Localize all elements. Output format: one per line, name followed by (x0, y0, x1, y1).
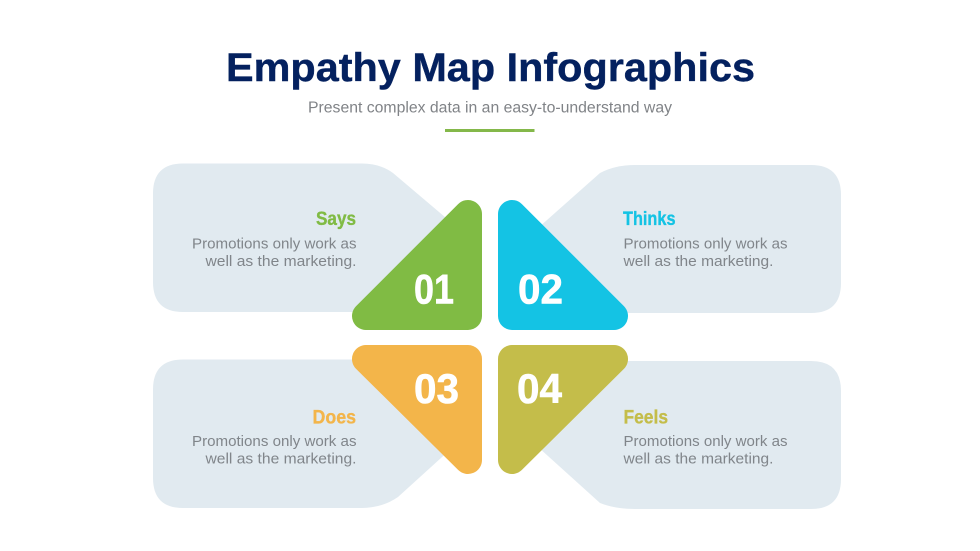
text block: does: well as the marketing. (204, 450, 356, 468)
triangle: 01 (352, 200, 482, 330)
heading: feels: Feels (624, 406, 668, 428)
title accent rule (445, 129, 534, 132)
text block: says: Promotions only work as (192, 236, 356, 252)
number 04: 04 (517, 365, 563, 412)
text block: does: Promotions only work as (192, 433, 356, 450)
triangle: 04 (498, 345, 628, 474)
text block: feels: Promotions only work as (624, 433, 788, 450)
number 03: 03 (414, 365, 459, 412)
number 01: 01 (414, 266, 454, 312)
triangle: 02 (498, 200, 628, 330)
panel: does (153, 345, 482, 508)
heading: does: Does (312, 406, 356, 428)
panel: says (153, 164, 482, 330)
panel background: does (153, 360, 452, 508)
triangle: 03 (352, 345, 482, 474)
title: Empathy Map Infographics (226, 46, 755, 90)
panel background: feels (538, 361, 841, 509)
panel: thinks (498, 165, 841, 330)
panel background: thinks (538, 165, 841, 313)
number 02: 02 (518, 266, 563, 312)
text block: says: well as the marketing. (204, 253, 356, 270)
subtitle: Present complex data in an easy-to-understand way (308, 100, 672, 116)
panel background: says (153, 164, 452, 312)
panel: feels (498, 345, 841, 509)
heading: says: Says (316, 208, 356, 230)
text block: thinks: well as the marketing. (622, 253, 774, 270)
text block: thinks: Promotions only work as (624, 236, 788, 252)
text block: feels: well as the marketing. (622, 450, 774, 468)
heading: thinks: Thinks (623, 208, 676, 230)
